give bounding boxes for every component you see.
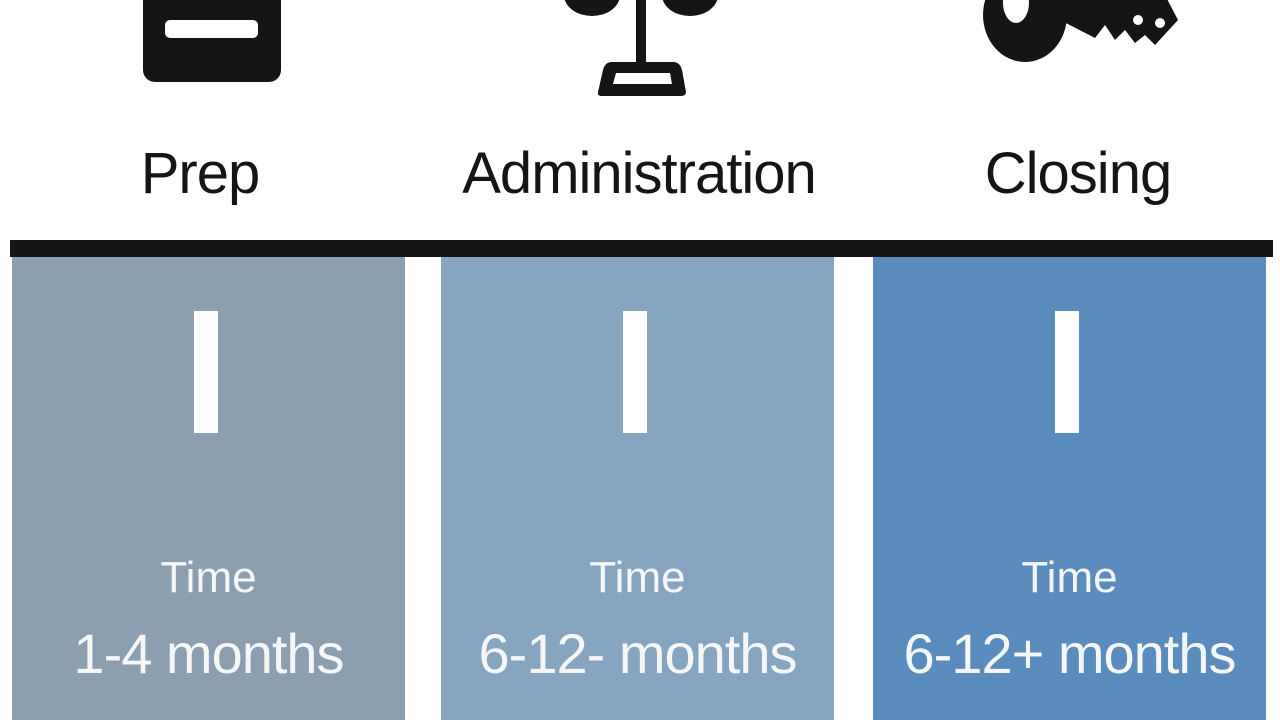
- panel: administration: 6-12- months: [479, 622, 796, 685]
- icon: scale: [564, 0, 718, 96]
- heading: Prep: Prep: [141, 141, 259, 206]
- panel: closing: 6-12+ months: [904, 622, 1235, 685]
- panel: prep: Time: [160, 553, 257, 602]
- heading: Administration: Administration: [462, 141, 816, 206]
- panel: prep: 1-4 months: [73, 622, 344, 685]
- panel: closing: Time: [1021, 553, 1118, 602]
- panel: closing: [873, 257, 1266, 720]
- heading: Closing: Closing: [985, 141, 1171, 206]
- icon: key: [983, 0, 1178, 62]
- panel: administration: Time: [589, 553, 686, 602]
- panel: prep: [12, 257, 405, 720]
- timeline bar: [10, 240, 1273, 257]
- icon: document: [143, 0, 281, 82]
- panel: administration: [441, 257, 834, 720]
